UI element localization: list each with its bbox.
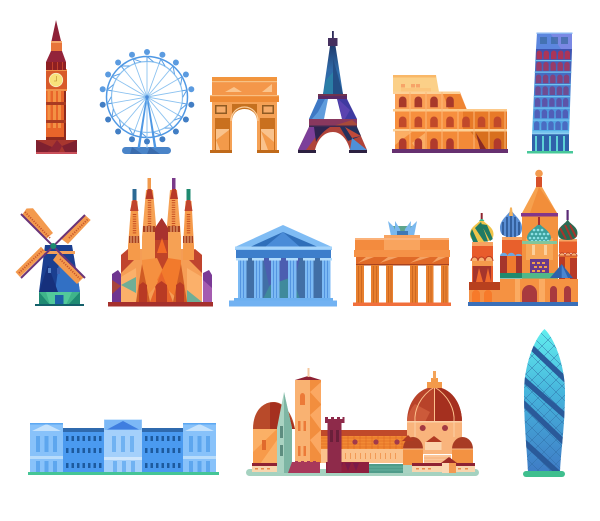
landmark: Leaning Tower of Pisa xyxy=(527,32,573,154)
basil centre details xyxy=(526,238,553,260)
palace mid block left xyxy=(63,428,104,472)
colosseum lower tier xyxy=(395,130,507,149)
palace right wing xyxy=(183,423,216,472)
colosseum upper tier xyxy=(395,92,467,110)
basil dark dome xyxy=(558,210,578,240)
landmark: windmill xyxy=(16,208,91,306)
landmark: Eiffel Tower xyxy=(298,31,367,153)
sagrada main body xyxy=(121,249,202,302)
basil teal dome xyxy=(522,217,557,244)
wheel legs xyxy=(138,97,156,148)
basil second tower xyxy=(502,237,522,256)
landmark: Big Ben xyxy=(36,20,77,154)
landmark: Brandenburg Gate xyxy=(353,221,451,306)
wheel pods xyxy=(100,49,194,92)
basil blue tent xyxy=(550,264,573,278)
gherkin dark spiral bands xyxy=(524,346,565,471)
basil lower facade xyxy=(500,279,578,302)
sagrada portals xyxy=(139,281,184,302)
florence main dome xyxy=(407,371,462,454)
palace centre wing xyxy=(104,420,142,472)
colosseum middle tier xyxy=(395,110,507,131)
florence low fronts xyxy=(412,463,475,466)
basil dome striped xyxy=(470,213,494,242)
florence crenellated tower xyxy=(325,417,344,472)
sagrada central gable xyxy=(155,218,168,302)
landmark: Pantheon xyxy=(229,225,337,306)
florence left dome xyxy=(253,402,295,429)
landmark: Colosseum xyxy=(392,75,508,153)
florence spire xyxy=(277,392,292,473)
basil left tower xyxy=(472,242,493,282)
florence ground xyxy=(246,469,479,476)
windmill sails xyxy=(22,208,53,239)
florence long building xyxy=(321,430,409,436)
basil central tent xyxy=(535,170,543,177)
quadriga xyxy=(388,221,417,236)
basil right tower xyxy=(559,239,577,253)
pantheon columns xyxy=(238,258,330,299)
florence teal steps xyxy=(369,464,403,473)
landmark: St Basil's Cathedral xyxy=(468,170,578,306)
gherkin lattice xyxy=(524,333,565,471)
gate columns xyxy=(356,265,448,303)
landmark: 30 St Mary Axe (The Gherkin) xyxy=(523,329,565,477)
palace ground xyxy=(28,472,219,475)
florence small domes xyxy=(403,449,423,465)
sagrada side chapels xyxy=(112,270,121,302)
landmark: London Eye xyxy=(100,49,194,154)
landmark: Florence Cathedral xyxy=(246,368,479,476)
palace left wing xyxy=(30,423,63,472)
wheel base xyxy=(122,147,171,154)
basil blue dome xyxy=(500,207,522,237)
florence bell tower xyxy=(295,380,321,463)
sagrada spires xyxy=(128,201,140,260)
landmark: Arc de Triomphe xyxy=(210,77,279,153)
pantheon cella xyxy=(238,258,330,299)
landmark: Buckingham Palace xyxy=(28,420,219,475)
florence wall xyxy=(288,461,320,473)
palace mid block right xyxy=(142,428,183,472)
landmark: Sagrada Familia xyxy=(108,178,213,306)
